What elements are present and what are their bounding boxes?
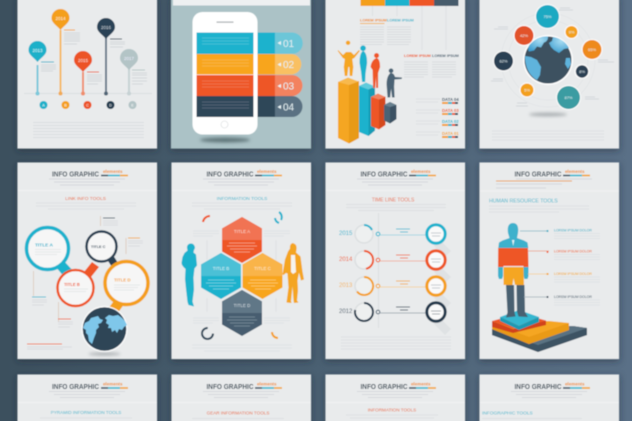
text blocks: LOREM IPSUM — [360, 18, 387, 22]
data legend — [416, 97, 459, 138]
panel: phone list — [171, 0, 311, 148]
panel: information tools — [172, 162, 311, 359]
pin 2015: 2015 — [78, 58, 89, 63]
callout labels: LOREM IPSUM DOLOR — [554, 250, 592, 254]
percentage bubbles: 65% — [588, 47, 596, 52]
lettered markers — [40, 101, 136, 109]
page header — [18, 169, 157, 190]
data legend: DATA 03 — [442, 108, 459, 113]
data legend: DATA 04 — [442, 97, 459, 102]
circle: title A — [26, 228, 68, 270]
heading: HUMAN RESOURCE TOOLS — [489, 198, 558, 204]
panel: business bars — [326, 0, 465, 148]
percentage bubbles: 87% — [564, 95, 573, 100]
rows: 2014: 2014 — [339, 257, 353, 263]
page header: INFO GRAPHIC — [206, 382, 254, 391]
intro lines — [346, 204, 446, 210]
orbit rings — [501, 13, 595, 107]
torso and arms — [498, 248, 528, 267]
hexagon: title C — [242, 253, 282, 299]
text blocks: LOREM IPSUM — [432, 54, 459, 58]
legs — [506, 285, 528, 318]
circle: title D: TITLE D — [114, 278, 131, 282]
text blocks: LOREM IPSUM — [404, 54, 431, 58]
tabs — [255, 32, 303, 117]
teal step — [500, 310, 539, 330]
callout labels: LOREM IPSUM DOLOR — [554, 228, 592, 232]
timeline spine — [378, 213, 380, 328]
percentage bubbles: 62% — [499, 58, 508, 64]
percentage bubbles: 9% — [569, 30, 575, 34]
page header: elements — [565, 169, 585, 174]
hexagon: title A — [222, 217, 262, 263]
callout labels: LOREM IPSUM DOLOR — [554, 272, 592, 276]
panel: link info tools — [18, 162, 157, 359]
heading: LINK INFO TOOLS — [65, 196, 106, 202]
panel: human resource tools — [480, 162, 619, 359]
woman figure — [182, 244, 197, 306]
globe — [523, 35, 573, 85]
human figure — [498, 223, 528, 318]
pin 2016: 2016 — [101, 25, 112, 30]
pin captions — [41, 30, 147, 84]
heading: PYRAMID INFORMATION TOOLS — [51, 410, 121, 415]
pin 2013 — [28, 41, 46, 96]
phone — [192, 12, 258, 134]
heading: INFORMATION TOOLS — [368, 408, 416, 412]
rows: 2013: 2013 — [339, 283, 353, 289]
orange layer — [492, 321, 569, 344]
lettered markers: D — [109, 104, 112, 108]
pin 2013: 2013 — [32, 48, 43, 53]
callouts — [27, 216, 143, 349]
page header: INFO GRAPHIC — [206, 170, 254, 178]
page header: elements — [257, 169, 277, 174]
panel: globe bubbles — [480, 0, 619, 148]
man figure — [282, 243, 304, 303]
page header — [480, 169, 619, 191]
percentage gauges — [202, 212, 282, 339]
page header: INFO GRAPHIC — [52, 170, 99, 178]
panel: infographic tools — [480, 374, 619, 421]
percentage bubbles: 75% — [543, 14, 552, 19]
page header: elements — [411, 382, 431, 386]
intro lines — [192, 203, 292, 209]
callout labels: LOREM IPSUM DOLOR — [554, 295, 592, 299]
heading: TIME LINE TOOLS — [372, 198, 415, 204]
page header: INFO GRAPHIC — [360, 170, 408, 178]
page header — [326, 382, 465, 402]
red layer — [492, 314, 546, 333]
percentage bubbles: 8% — [579, 69, 585, 74]
page header: elements — [257, 382, 277, 386]
hexagon: title B: TITLE B — [213, 266, 229, 271]
top colour bar — [360, 0, 458, 50]
pin 2016 — [97, 18, 115, 96]
pin 2017 — [120, 49, 138, 96]
page header — [172, 382, 311, 402]
page header: elements — [411, 169, 431, 174]
circle: title B: TITLE B — [64, 282, 80, 287]
page header: INFO GRAPHIC — [360, 382, 408, 391]
pin 2014: 2014 — [55, 16, 66, 21]
page header: INFO GRAPHIC — [52, 382, 99, 391]
rows: 2014 — [339, 251, 445, 269]
rows: 2012 — [339, 303, 445, 321]
head and shoulders — [498, 223, 528, 248]
hexagon: title C: TITLE C — [254, 266, 272, 271]
percentage bubbles — [493, 4, 602, 110]
panel: milestone pins — [18, 0, 157, 148]
phone shadow — [200, 138, 250, 142]
navy layer — [492, 326, 587, 352]
tabs: 01 — [283, 39, 295, 50]
timeline axis — [24, 92, 152, 94]
rows: 2015: 2015 — [339, 231, 353, 237]
shorts — [504, 267, 524, 285]
page header — [18, 382, 157, 402]
pin 2015 — [74, 51, 92, 96]
percentage bubbles: 5% — [524, 88, 530, 92]
business figures — [338, 41, 402, 98]
data legend: DATA 02 — [442, 119, 459, 124]
panel: gear information tools — [172, 374, 311, 421]
hexagon: title D: TITLE D — [234, 303, 251, 308]
heading: INFORMATION TOOLS — [217, 196, 267, 202]
circle: title B — [58, 270, 94, 306]
hexagon: title D — [222, 290, 262, 336]
percentage bubbles: 42% — [520, 33, 528, 38]
tabs: 04 — [283, 102, 295, 114]
circle: title C — [86, 232, 116, 262]
hands — [498, 267, 528, 279]
page header — [480, 382, 619, 402]
rows: 2012: 2012 — [339, 309, 353, 315]
tabs: 03 — [283, 82, 295, 92]
body text lines — [341, 337, 451, 349]
stepped platform — [492, 310, 587, 352]
pin 2014 — [52, 9, 70, 96]
text blocks — [360, 18, 459, 58]
heading: INFOGRAPHIC TOOLS — [482, 410, 533, 416]
page header — [326, 169, 465, 190]
pin 2017: 2017 — [124, 56, 135, 61]
callouts — [520, 230, 549, 298]
body text lines — [492, 131, 604, 140]
data legend: DATA 01 — [442, 131, 459, 136]
page header: INFO GRAPHIC — [514, 382, 562, 391]
panel: information tools lower — [326, 374, 465, 421]
lettered markers: E — [131, 104, 134, 108]
page header — [172, 169, 311, 190]
rows: 2013 — [339, 277, 445, 295]
page header: elements — [103, 169, 123, 174]
lettered markers: B — [64, 104, 67, 108]
hexagon: title A: TITLE A — [234, 229, 250, 234]
page header: elements — [103, 382, 123, 386]
globe shadow — [529, 113, 567, 116]
circle: title D — [105, 262, 148, 304]
globe — [82, 306, 128, 356]
bubble labels — [491, 8, 614, 106]
side notes — [192, 231, 292, 351]
text blocks: LOREM IPSUM — [387, 18, 414, 22]
connectors — [55, 255, 125, 314]
panel: time line tools — [326, 162, 465, 359]
circle: title A: TITLE A — [35, 242, 53, 248]
circle: title C: TITLE C — [91, 245, 106, 249]
isometric bars — [338, 78, 396, 144]
hexagon: title B — [201, 253, 241, 299]
page header: elements — [565, 382, 585, 386]
lettered markers: C — [86, 104, 89, 108]
panel: pyramid information tools — [18, 374, 157, 421]
tabs: 02 — [283, 60, 295, 71]
rows: 2015 — [339, 225, 445, 243]
body text lines — [33, 122, 144, 138]
heading: GEAR INFORMATION TOOLS — [207, 410, 269, 416]
intro lines — [489, 206, 589, 212]
lettered markers: A — [42, 104, 45, 108]
circle shadows — [434, 240, 451, 335]
intro lines — [36, 203, 136, 209]
page header: INFO GRAPHIC — [514, 170, 562, 178]
callout labels — [554, 228, 600, 305]
